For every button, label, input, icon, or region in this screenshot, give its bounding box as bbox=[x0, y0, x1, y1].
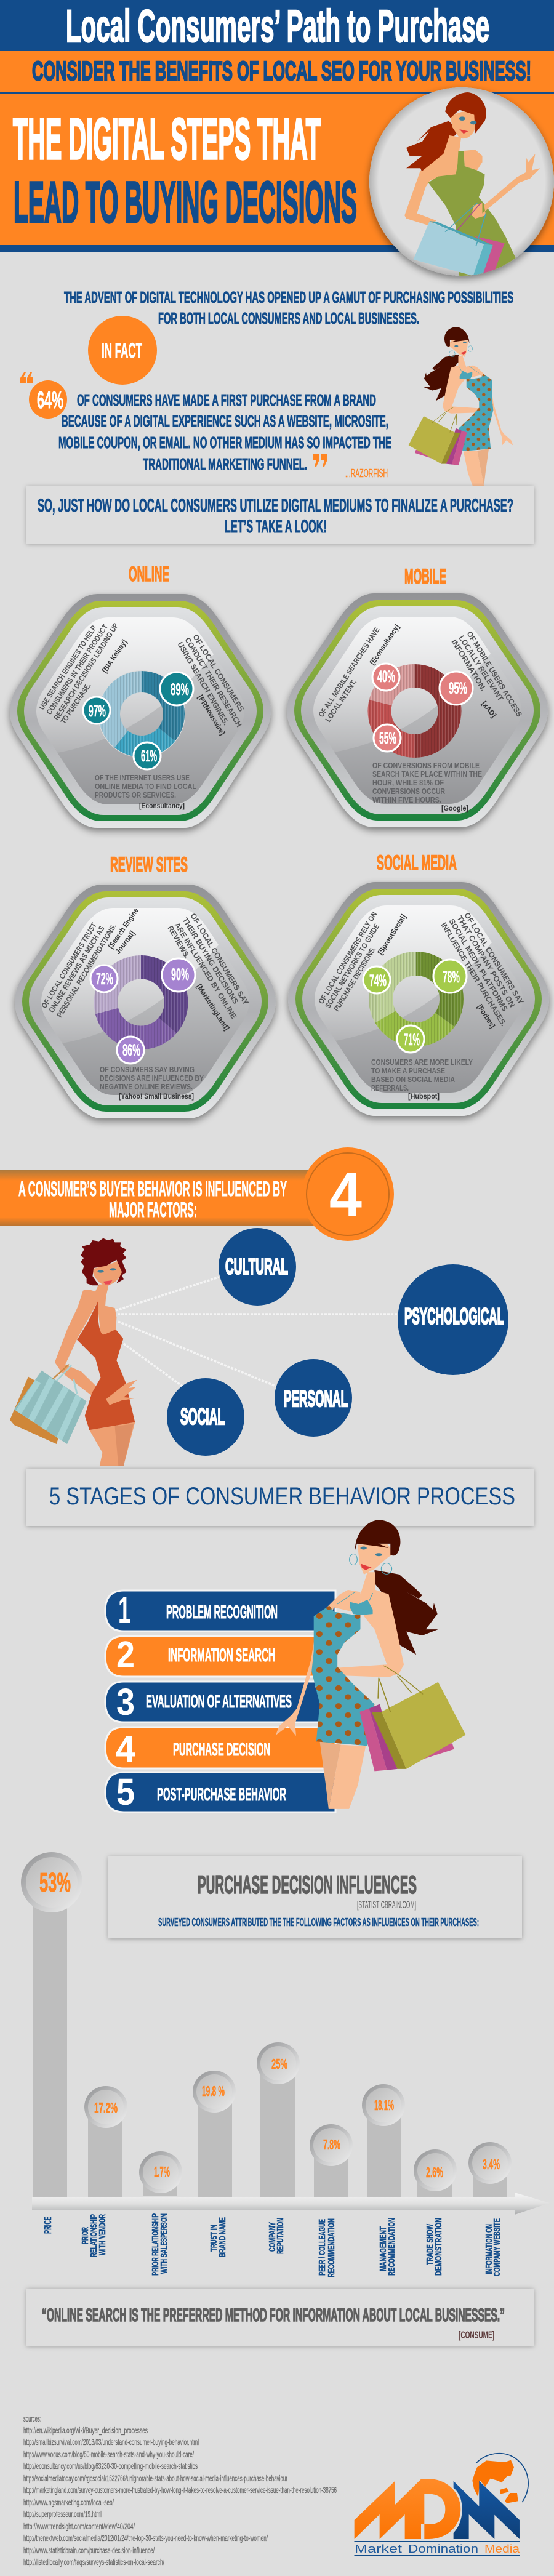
stat: 71%: BASED ON SOCIAL MEDIA bbox=[371, 1075, 455, 1084]
rotated stat: 72%: PERSONAL RECOMMENDATIONS. bbox=[55, 922, 118, 1019]
rotated stat: 40%: LOCAL INTENT. bbox=[324, 678, 358, 724]
dashed connector lines bbox=[116, 1277, 398, 1386]
bar value: 3.4% bbox=[468, 2142, 512, 2184]
factor: cultural: CULTURAL bbox=[225, 1254, 288, 1279]
quote text: TRADITIONAL MARKETING FUNNEL. bbox=[143, 455, 307, 473]
donut chart: review sites bbox=[106, 967, 176, 1038]
bar value: 7.8% bbox=[310, 2124, 353, 2166]
stage 5: 5 bbox=[116, 1771, 135, 1813]
banner text: MAJOR FACTORS: bbox=[109, 1198, 197, 1222]
bar value: 17.2%: 17.2% bbox=[94, 2100, 118, 2116]
bar value: 19.8% bbox=[193, 2071, 236, 2113]
badge: 89% bbox=[160, 672, 193, 705]
rotated stat: 97%: [BIA Kelsey] bbox=[100, 638, 129, 675]
bar labels: PRIOR RELATIONSHIP bbox=[150, 2213, 161, 2276]
stat: 55% bbox=[372, 761, 482, 813]
stat: 55%: OF CONVERSIONS FROM MOBILE bbox=[372, 761, 480, 770]
sources list: http://www.ngsmarketing.com/local-seo/ bbox=[23, 2497, 114, 2507]
rotated stat: 78%: SOCIAL MEDIA PLATFORMS bbox=[447, 917, 510, 1013]
badge: 55%: 55% bbox=[379, 729, 396, 747]
sources list: http://www.statisticbrain.com/purchase-decision-influence/ bbox=[23, 2545, 155, 2555]
badge: in fact: IN FACT bbox=[102, 339, 142, 363]
bar value: 7.8%: 7.8% bbox=[323, 2137, 340, 2153]
quote attribution: ...RAZORFISH bbox=[345, 467, 388, 479]
icon: opening quote bbox=[20, 372, 33, 383]
stat: 61% bbox=[95, 774, 196, 810]
rotated stat: 95%: INFORMATION. bbox=[449, 638, 488, 692]
logo wordmark: Domination bbox=[408, 2543, 478, 2555]
sources list: http://smallbizsurvival.com/2013/03/understand-consumer-buying-behavior.html bbox=[23, 2437, 199, 2447]
illustration: woman in orange dress bbox=[10, 1238, 137, 1466]
badge: 40%: 40% bbox=[377, 667, 395, 686]
heading box: 5 stages bbox=[26, 1469, 534, 1526]
stage 1: 1 bbox=[118, 1589, 130, 1631]
rotated stat: 90%: THEIR BUYING DECISIONS bbox=[180, 916, 240, 1006]
quote box: online search bbox=[26, 2289, 534, 2346]
badge: 72%: 72% bbox=[96, 969, 113, 988]
badge: 97%: 97% bbox=[89, 702, 106, 720]
banner: four major factors bbox=[0, 1147, 394, 1241]
stage 2 bbox=[105, 1634, 335, 1677]
stage 3: EVALUATION OF ALTERNATIVES bbox=[146, 1691, 292, 1712]
bar labels: COMPANY bbox=[267, 2222, 278, 2252]
rotated stat: 72%: [Search Engine bbox=[106, 906, 140, 950]
quote text bbox=[58, 391, 391, 473]
bar labels: WITH SALESPERSON bbox=[159, 2213, 169, 2274]
panel: review sites bbox=[15, 853, 276, 1118]
sources list bbox=[23, 2413, 337, 2567]
badge: 64 percent: 64% bbox=[37, 387, 63, 414]
bar labels: COMPANY WEBSITE bbox=[492, 2218, 502, 2276]
hero banner bbox=[0, 92, 554, 252]
factor: personal: PERSONAL bbox=[284, 1386, 348, 1411]
heading: mobile: MOBILE bbox=[404, 565, 446, 588]
rotated stat: 97%: RESEARCH DECISIONS LEADING UP bbox=[52, 622, 120, 722]
stat: 71%: CONSUMERS ARE MORE LIKELY bbox=[371, 1058, 473, 1067]
stat: 55%: SEARCH TAKE PLACE WITHIN THE bbox=[372, 770, 482, 779]
bar labels: PRIOR bbox=[80, 2227, 90, 2244]
badge: 97% bbox=[83, 697, 110, 724]
bar value: 25%: 25% bbox=[271, 2056, 287, 2072]
factor: psychological bbox=[398, 1264, 508, 1375]
panel: online bbox=[10, 563, 271, 828]
rotated stat: 97%: USE SEARCH ENGINES TO HELP bbox=[38, 624, 98, 712]
rotated stat: 90% bbox=[166, 912, 251, 1032]
logo wordmark: Media bbox=[484, 2543, 520, 2555]
badge: 74%: 74% bbox=[369, 971, 387, 990]
stat: 55%: WITHIN FIVE HOURS. bbox=[372, 796, 441, 804]
donut chart: mobile bbox=[379, 676, 449, 746]
badge: 72% bbox=[90, 965, 118, 992]
rotated stat: 90%: OF LOCAL CONSUMERS SAY bbox=[188, 912, 251, 1007]
rotated stat: 74%: [SproutSocial] bbox=[376, 913, 408, 957]
bar labels: PRICE bbox=[42, 2217, 54, 2234]
stage 3: 3 bbox=[116, 1681, 135, 1723]
bar labels: BRAND NAME bbox=[217, 2217, 228, 2257]
rotated stat: 89%: OF LOCAL CONSUMERS bbox=[191, 633, 246, 713]
badge: 95% bbox=[440, 672, 473, 705]
rotated stat: 95%: [xAD] bbox=[480, 699, 498, 719]
rotated stat: 74%: PURCHASE DECISIONS. bbox=[332, 945, 377, 1013]
callout box: let's take a look: LET’S TAKE A LOOK! bbox=[225, 516, 327, 537]
bar value: 1.7%: 1.7% bbox=[154, 2164, 170, 2180]
bar value: price 53% bbox=[21, 1852, 82, 1912]
stage 2: 2 bbox=[116, 1634, 135, 1675]
bar value: 3.4%: 3.4% bbox=[483, 2156, 500, 2172]
badge: 78%: 78% bbox=[443, 968, 460, 986]
badge: 86% bbox=[117, 1037, 144, 1064]
rotated stat: 40%: OF ALL MOBILE SEARCHES HAVE bbox=[317, 626, 382, 719]
callout box: let's take a look bbox=[26, 486, 534, 544]
heading box: purchase decision influences: [STATISTICBRAIN.COM] bbox=[357, 1899, 416, 1911]
badge: number 4: 4 bbox=[329, 1160, 362, 1230]
bar labels: RECOMMENDATION bbox=[326, 2218, 337, 2277]
donut chart: social media bbox=[380, 964, 452, 1034]
intro text bbox=[64, 288, 513, 327]
badge: 74% bbox=[363, 966, 390, 993]
hexagon frame bbox=[10, 594, 271, 828]
sources list: http://econsultancy.com/us/blog/63230-30-compelling-mobile-search-statistics bbox=[23, 2461, 198, 2471]
factor: personal bbox=[275, 1359, 352, 1437]
badge: 90%: 90% bbox=[171, 965, 189, 984]
stat: 71%: [Hubspot] bbox=[408, 1092, 440, 1101]
stage 1: PROBLEM RECOGNITION bbox=[166, 1602, 278, 1623]
bar value: 18.1%: 18.1% bbox=[374, 2097, 394, 2113]
rotated stat: 72%: ONLINE REVIEWS AS MUCH AS bbox=[47, 925, 106, 1014]
sources list: http://socialmediatoday.com/rgbsocial/1532766/unignorable-stats-about-how-social-media-influences-purchase-behaviour bbox=[23, 2473, 287, 2483]
panel: mobile bbox=[287, 565, 548, 827]
stat: 86%: OF CONSUMERS SAY BUYING bbox=[100, 1065, 195, 1074]
bar labels: TRUST IN bbox=[209, 2225, 219, 2252]
rotated stat: 97%: CONSUMERS IN THEIR PRODUCT bbox=[45, 623, 110, 716]
logo wordmark: Market bbox=[355, 2543, 402, 2555]
bar chart: purchase decision influences bbox=[21, 1852, 550, 2277]
bar labels bbox=[42, 2213, 502, 2277]
badge: 89%: 89% bbox=[171, 680, 189, 699]
badge: 90% bbox=[162, 958, 195, 992]
sources list: http://thenextweb.com/socialmedia/2012/01/24/the-top-30-stats-you-need-to-know-when-marketing-to-women/ bbox=[23, 2533, 268, 2543]
rotated stat: 74% bbox=[317, 910, 408, 1013]
logo mark bbox=[355, 2454, 528, 2539]
rotated stat: 95%: LOCALLY RELEVANT bbox=[457, 634, 505, 703]
rotated stat: 78%: OF LOCAL CONSUMERS SAY bbox=[462, 911, 526, 1006]
stage 3 bbox=[105, 1681, 335, 1723]
heading: social media: SOCIAL MEDIA bbox=[377, 851, 457, 875]
stat: 71% bbox=[371, 1058, 473, 1101]
heading: online: ONLINE bbox=[129, 563, 169, 586]
badge: in fact bbox=[88, 316, 157, 385]
stage 5 bbox=[105, 1771, 335, 1813]
badge: 86%: 86% bbox=[122, 1041, 140, 1059]
stage 4 bbox=[105, 1727, 335, 1770]
stat: 86%: DECISIONS ARE INFLUENCED BY bbox=[100, 1074, 204, 1083]
heading box: purchase decision influences bbox=[108, 1856, 522, 1938]
badge: 40% bbox=[372, 664, 399, 691]
stat: 71%: TO MAKE A PURCHASE bbox=[371, 1067, 445, 1075]
sources list: http://listedlocally.com/faqs/surveys-statistics-on-local-search/ bbox=[23, 2557, 164, 2567]
logo rule lines bbox=[355, 2541, 520, 2556]
bar labels: INFORMATION ON bbox=[484, 2224, 494, 2274]
stat: 71%: REFERRALS. bbox=[371, 1084, 409, 1093]
sources list: sources: bbox=[23, 2413, 41, 2423]
stage 2: INFORMATION SEARCH bbox=[168, 1645, 275, 1666]
badge: 64 percent bbox=[29, 380, 67, 419]
stage 4: PURCHASE DECISION bbox=[173, 1739, 270, 1760]
bar value: 18.1% bbox=[362, 2084, 405, 2126]
hexagon frame bbox=[15, 885, 276, 1118]
logo: market domination media bbox=[355, 2454, 528, 2556]
quote box: online search: [CONSUME] bbox=[459, 2329, 494, 2341]
bar value: 25% bbox=[257, 2042, 300, 2084]
stat: 61%: ONLINE MEDIA TO FIND LOCAL bbox=[95, 782, 196, 791]
hexagon frame bbox=[288, 882, 549, 1116]
factor: cultural bbox=[219, 1228, 296, 1306]
badge: 78% bbox=[433, 960, 467, 993]
factor: social bbox=[167, 1378, 244, 1456]
rotated stat: 89%: USING SEARCH ENGINES. bbox=[175, 640, 231, 727]
bar labels: MANAGEMENT bbox=[378, 2226, 388, 2271]
badge: number 4 bbox=[302, 1147, 394, 1241]
stat: 61%: [Econsultancy] bbox=[139, 801, 185, 810]
rotated stat: 89%: [PRNewswire] bbox=[196, 693, 227, 737]
rotated stat: 97% bbox=[38, 622, 129, 726]
logo wordmark bbox=[355, 2543, 520, 2555]
panel: social media bbox=[288, 851, 549, 1116]
header: subtitle band bbox=[0, 51, 554, 92]
bar labels: PEER / COLLEAGUE bbox=[317, 2219, 327, 2276]
rotated stat: 40%: [Econsultancy] bbox=[368, 623, 401, 667]
rotated stat: 74%: SOCIAL NETWORKS TO GUIDE bbox=[324, 922, 381, 1010]
factor: social: SOCIAL bbox=[180, 1404, 225, 1429]
badge: 61%: 61% bbox=[141, 747, 157, 765]
stat: 61%: PRODUCTS OR SERVICES. bbox=[95, 791, 176, 800]
bar labels: WITH VENDOR bbox=[97, 2214, 108, 2255]
bar labels: DEMONSTRATION bbox=[433, 2218, 444, 2276]
icon: closing quote bbox=[313, 454, 327, 467]
rotated stat: 78%: THAT COMPANY POSTS ON bbox=[455, 914, 517, 1009]
badge: 55% bbox=[374, 724, 401, 752]
hexagon frame bbox=[287, 593, 548, 827]
stat: 86%: [Yahoo! Small Business] bbox=[119, 1092, 194, 1101]
sources list: http://en.wikipedia.org/wiki/Buyer_decision_processes bbox=[23, 2425, 148, 2435]
badge: 71% bbox=[397, 1025, 424, 1053]
heading: review sites: REVIEW SITES bbox=[110, 853, 188, 877]
illustration: woman in polka dot dress bbox=[409, 327, 513, 486]
badge: 61% bbox=[134, 742, 161, 769]
badge: 95%: 95% bbox=[449, 679, 467, 697]
rotated stat: 89%: CONDUCT THEIR RESEARCH bbox=[183, 636, 243, 729]
arrow axis bbox=[32, 2193, 550, 2215]
rotated stat: 72%: OF LOCAL CONSUMERS TRUST bbox=[40, 921, 98, 1010]
rotated stat: 90%: [MarketingLand] bbox=[195, 982, 231, 1032]
sources list: http://superprofesseur.com/19.html bbox=[23, 2509, 102, 2519]
bar value: 2.6% bbox=[414, 2149, 457, 2191]
stage 4: 4 bbox=[116, 1728, 135, 1770]
rotated stat: 78%: INFLUENCE THEIR PURCHASES. bbox=[439, 921, 508, 1028]
rotated stat: 72%: Journal] bbox=[113, 929, 137, 956]
banner text bbox=[18, 1178, 287, 1222]
sources list: http://www.vocus.com/blog/50-mobile-search-stats-and-why-you-should-care/ bbox=[23, 2449, 194, 2459]
sources list: http://www.trendsight.com/content/view/40/204/ bbox=[23, 2521, 135, 2531]
bar value: 17.2% bbox=[84, 2086, 127, 2128]
donut chart: online bbox=[98, 671, 185, 757]
bar value: price 53%: 53% bbox=[39, 1868, 71, 1898]
bars bbox=[33, 1884, 507, 2197]
stat: 86%: NEGATIVE ONLINE REVIEWS. bbox=[100, 1083, 193, 1091]
stat: 55%: [Google] bbox=[441, 804, 468, 813]
badge: 71%: 71% bbox=[404, 1030, 420, 1049]
bar value: 1.7% bbox=[139, 2151, 182, 2193]
illustration: woman in polka dot dress with bags bbox=[276, 1520, 466, 1809]
rotated stat: 97%: TO PURCHASE. bbox=[59, 681, 93, 726]
bar value: 2.6%: 2.6% bbox=[426, 2164, 443, 2180]
header: title band bbox=[0, 0, 554, 52]
stat: 55%: HOUR, WHILE 81% OF bbox=[372, 779, 444, 787]
rotated stat: 90%: ARE INFLUENCED BY ONLINE bbox=[172, 921, 238, 1021]
stage 1 bbox=[105, 1589, 335, 1631]
rotated stat: 90%: REVIEWS. bbox=[166, 925, 191, 960]
bar labels: RELATIONSHIP bbox=[89, 2214, 99, 2257]
rotated stat: 78%: [Forbes] bbox=[475, 1003, 497, 1030]
stat: 61%: OF THE INTERNET USERS USE bbox=[95, 774, 190, 782]
rotated stat: 95%: OF MOBILE USERS ACCESS bbox=[465, 630, 524, 718]
stat: 86% bbox=[100, 1065, 204, 1101]
stage 5: POST-PURCHASE BEHAVIOR bbox=[157, 1784, 286, 1805]
rotated stat: 74%: OF LOCAL CONSUMERS RELY ON bbox=[317, 910, 379, 1006]
bar labels: REPUTATION bbox=[275, 2218, 286, 2254]
bar value: 19.8%: 19.8 % bbox=[202, 2083, 225, 2099]
oval portrait: woman with shopping bags bbox=[369, 87, 554, 276]
stat: 55%: CONVERSIONS OCCUR bbox=[372, 787, 445, 796]
bar labels: RECOMMENDATION bbox=[387, 2218, 397, 2276]
bar labels: TRADE SHOW bbox=[425, 2223, 435, 2265]
